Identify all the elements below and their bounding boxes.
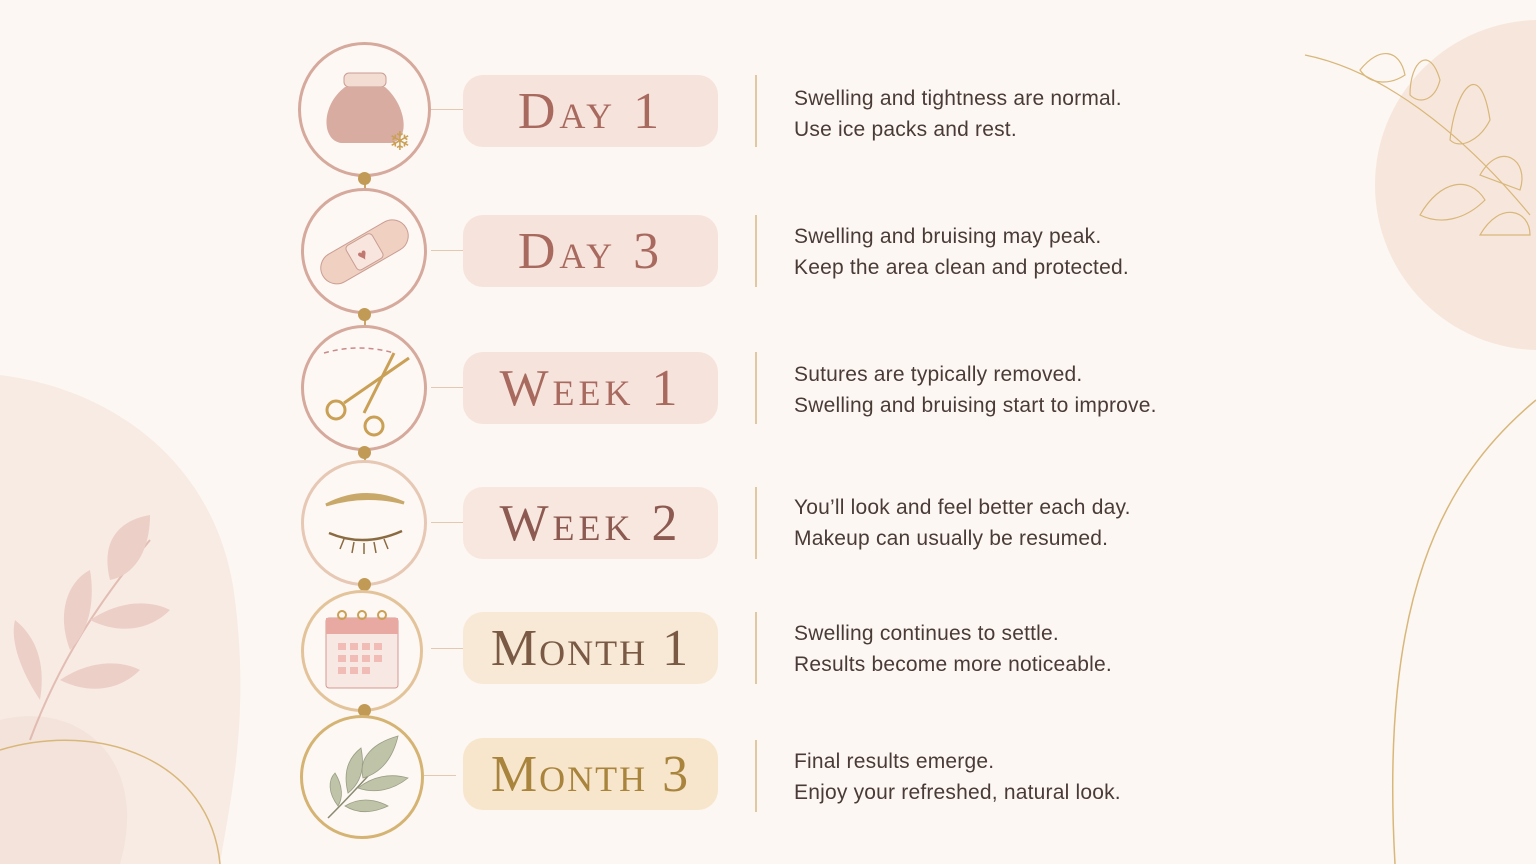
description [794,363,1157,417]
connector [431,387,463,388]
description: Use ice packs and rest. [794,118,1017,141]
label pill: Day 1 [518,82,663,140]
label pill [463,352,718,424]
description [794,496,1131,550]
row: week 1 [301,325,1157,451]
description [794,87,1122,141]
connector [424,775,456,776]
label pill [463,738,718,810]
description: Sutures are typically removed. [794,363,1082,386]
icon: bandage: ♥ [355,246,371,265]
description: You’ll look and feel better each day. [794,496,1131,519]
description: Results become more noticeable. [794,653,1112,676]
icon: bandage [301,188,427,314]
row: month 3 [300,715,1121,839]
row: day 1 [298,42,1122,177]
connector [431,522,463,523]
description: Final results emerge. [794,750,994,773]
dot [358,308,371,321]
label pill: Week 1 [499,360,682,416]
dot [358,446,371,459]
description: Keep the area clean and protected. [794,256,1129,279]
description: Makeup can usually be resumed. [794,527,1108,550]
dot [358,172,371,185]
row: month 1 [301,590,1112,712]
label pill: Month 3 [491,746,690,802]
timeline connector line [364,170,366,720]
dot [358,578,371,591]
connector [431,648,463,649]
description: Enjoy your refreshed, natural look. [794,781,1121,804]
description [794,750,1121,804]
icon: scissors [301,325,427,451]
divider [755,740,756,812]
label pill [463,487,718,559]
description [794,622,1112,676]
divider [755,487,756,559]
divider [755,352,756,424]
description: Swelling and tightness are normal. [794,87,1122,110]
label pill: Day 3 [518,222,663,280]
label pill: Week 2 [499,494,682,552]
label pill [463,612,718,684]
icon: leaf sprig [300,715,424,839]
connector [431,250,463,251]
divider [755,215,756,287]
dot [358,704,371,717]
divider [755,75,756,147]
description: Swelling and bruising start to improve. [794,394,1157,417]
icon: ice pack: ❄ [389,126,411,156]
row: week 2 [301,460,1131,586]
connector [431,109,463,110]
divider [755,612,756,684]
label pill [463,215,718,287]
icon: closed eye [301,460,427,586]
row: day 3 [301,188,1129,314]
icon: ice pack [298,42,431,177]
description [794,225,1129,279]
description: Swelling continues to settle. [794,622,1059,645]
icon: calendar [301,590,423,712]
label pill: Month 1 [491,620,690,676]
description: Swelling and bruising may peak. [794,225,1101,248]
label pill [463,75,718,147]
